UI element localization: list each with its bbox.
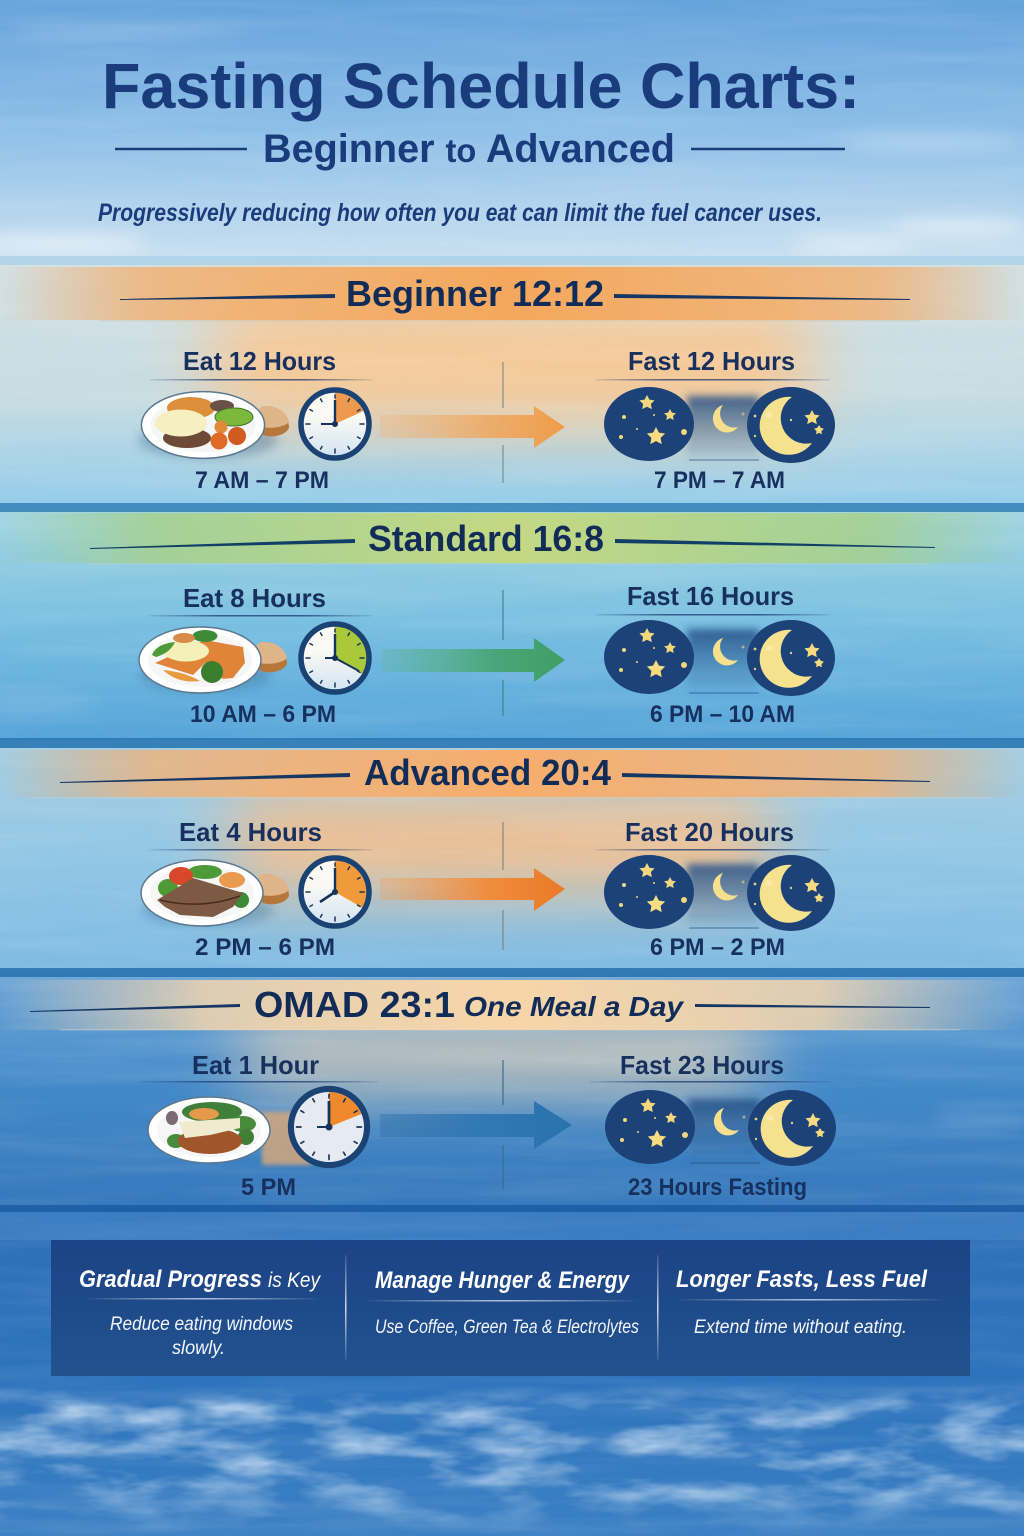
section background: standard bbox=[0, 506, 1024, 742]
section background: beginner bbox=[0, 262, 1024, 508]
tip: longer fasts: Extend time without eating. bbox=[694, 1317, 907, 1338]
banner: Advanced 20:4: Advanced 20:4 bbox=[364, 752, 611, 793]
eat heading: Eat 8 Hours bbox=[183, 583, 326, 613]
tagline: Progressively reducing how often you eat can limit the fuel cancer uses. bbox=[98, 199, 822, 227]
fast heading: Fast 23 Hours bbox=[620, 1050, 784, 1080]
fast time window: 23 Hours Fasting bbox=[628, 1174, 807, 1201]
eat time window: 10 AM – 6 PM bbox=[190, 701, 336, 728]
arrow bbox=[380, 868, 565, 911]
icon: night moons and stars bbox=[604, 620, 835, 696]
fast time window: 6 PM – 2 PM bbox=[650, 934, 785, 961]
tip: longer fasts: Longer Fasts, Less Fuel bbox=[676, 1266, 928, 1293]
banner: Standard 16:8 bbox=[0, 513, 1024, 564]
icon: night moons and stars bbox=[604, 855, 835, 931]
divider bbox=[502, 362, 504, 483]
icon: clock with orange wedge bbox=[301, 858, 369, 926]
icon: night moons and stars bbox=[604, 387, 835, 463]
tip: longer fasts bbox=[675, 1266, 945, 1338]
panel: Standard 16:8 bbox=[0, 513, 1024, 728]
eat heading: Eat 1 Hour bbox=[192, 1050, 319, 1080]
section background: advanced bbox=[0, 740, 1024, 972]
banner: OMAD 23:1 One Meal a Day bbox=[0, 980, 1024, 1030]
eat heading: Eat 12 Hours bbox=[183, 346, 336, 376]
tip: manage hunger: Use Coffee, Green Tea & Electrolytes bbox=[375, 1317, 639, 1338]
banner: OMAD 23:1 One Meal a Day: One Meal a Day bbox=[464, 991, 685, 1022]
footer background bbox=[0, 1208, 1024, 1536]
fast heading: Fast 12 Hours bbox=[628, 346, 795, 376]
tip: gradual progress: Reduce eating windows bbox=[110, 1314, 293, 1335]
eat time window: 5 PM bbox=[241, 1174, 296, 1201]
eat time window: 2 PM – 6 PM bbox=[195, 934, 335, 961]
fast time window: 7 PM – 7 AM bbox=[654, 467, 785, 494]
banner: Advanced 20:4 bbox=[0, 750, 1024, 798]
eat time window: 7 AM – 7 PM bbox=[195, 467, 329, 494]
banner: Beginner 12:12 bbox=[0, 267, 1024, 322]
tip: gradual progress bbox=[79, 1266, 321, 1359]
orange glow behind plate bbox=[262, 1112, 312, 1165]
banner: Beginner 12:12: Beginner 12:12 bbox=[346, 273, 604, 314]
subtitle with rules: Beginner to Advanced bbox=[263, 127, 675, 171]
divider bbox=[502, 822, 504, 950]
section background: OMAD bbox=[0, 970, 1024, 1210]
sky background bbox=[0, 0, 1024, 265]
fast time window: 6 PM – 10 AM bbox=[650, 701, 795, 728]
title: Fasting Schedule Charts: bbox=[102, 50, 860, 122]
panel: Advanced 20:4 bbox=[0, 750, 1024, 961]
fast heading: Fast 20 Hours bbox=[625, 817, 794, 847]
icon: plate of patty and greens bbox=[148, 1097, 270, 1163]
arrow bbox=[380, 1101, 572, 1149]
panel: Beginner 12:12 bbox=[0, 267, 1024, 494]
tip: manage hunger: Manage Hunger & Energy bbox=[375, 1267, 630, 1294]
panel: OMAD 23:1 bbox=[0, 980, 1024, 1201]
icon: plate of steak bbox=[141, 860, 289, 926]
arrow bbox=[380, 406, 565, 448]
icon: night moons and stars bbox=[605, 1090, 836, 1166]
arrow bbox=[382, 638, 565, 682]
banner: OMAD 23:1 One Meal a Day: OMAD 23:1 bbox=[254, 984, 455, 1025]
icon: clock with orange wedge bbox=[301, 390, 369, 458]
icon: clock with orange wedge bbox=[291, 1089, 367, 1165]
banner: Standard 16:8: Standard 16:8 bbox=[368, 518, 604, 559]
fast heading: Fast 16 Hours bbox=[627, 581, 794, 611]
icon: clock with green wedge bbox=[301, 624, 369, 692]
eat heading: Eat 4 Hours bbox=[179, 817, 322, 847]
icon: plate of salmon bbox=[139, 627, 287, 693]
divider bbox=[502, 590, 504, 716]
icon: plate of food bbox=[138, 392, 289, 458]
tip: gradual progress: slowly. bbox=[172, 1338, 225, 1359]
panel: key tips bbox=[51, 1240, 970, 1376]
tip: manage hunger bbox=[362, 1267, 640, 1338]
tip: gradual progress: Gradual Progress is Key bbox=[79, 1266, 321, 1293]
divider bbox=[502, 1060, 504, 1190]
